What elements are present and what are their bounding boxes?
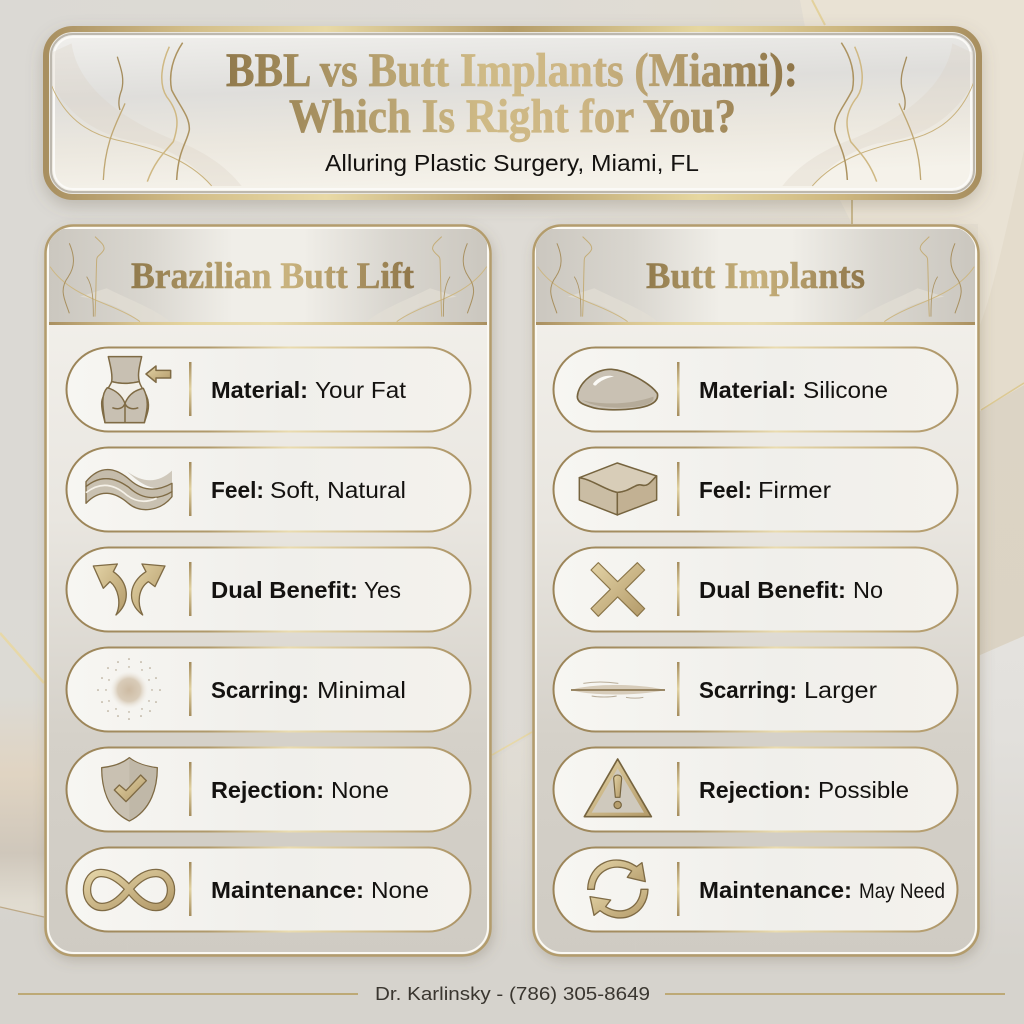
row: Maintenance [66, 848, 470, 932]
text: Scarring [211, 677, 406, 703]
text: Feel: Feel: [699, 477, 752, 503]
panel: Butt Implants [534, 226, 978, 956]
row: Material [66, 348, 470, 432]
text: Maintenance: None [371, 877, 429, 903]
text: Rejection [211, 777, 389, 803]
text: Material: Material: [211, 377, 308, 403]
text: Feel [699, 477, 831, 503]
text: Rejection: Possible [818, 777, 909, 803]
icon: two diverging arrows [93, 564, 165, 615]
icon: warning triangle [584, 759, 651, 817]
icon: soft waves [86, 470, 172, 510]
row: Scarring [554, 648, 958, 732]
text: Dual Benefit: Yes [364, 577, 401, 603]
panel: Brazilian Butt Lift [46, 226, 490, 956]
row: Dual Benefit [554, 548, 958, 632]
text: Scarring: Larger [804, 677, 877, 703]
footer: Dr. Karlinsky - (786) 305-8649 [375, 984, 650, 1004]
icon: waist and hips with arrow [102, 357, 171, 423]
text: Dual Benefit: No [853, 577, 883, 603]
text: Maintenance: May Need [859, 880, 945, 903]
text: Feel: Soft, Natural [270, 477, 406, 503]
text: Material: Your Fat [315, 377, 407, 403]
text: Rejection: None [331, 777, 389, 803]
text: Rejection: Rejection: [211, 777, 324, 803]
icon: firm block [579, 463, 657, 515]
text: Maintenance: Maintenance: [699, 877, 852, 903]
panel header: Butt Implants: Butt Implants [646, 256, 865, 297]
icon: refresh arrows [588, 860, 648, 918]
text: Scarring: Minimal [317, 677, 406, 703]
panel header: Brazilian Butt Lift: Brazilian Butt Lift [131, 256, 415, 297]
icon: shield with check [102, 758, 157, 821]
title text: Which Is Right for You? [289, 90, 736, 143]
row: Material [554, 348, 958, 432]
text: Maintenance [211, 877, 429, 903]
text: Maintenance: Maintenance: [211, 877, 364, 903]
text: Maintenance [699, 877, 945, 903]
text: Scarring: Scarring: [699, 677, 797, 703]
icon: X mark [591, 563, 645, 616]
text: Dual Benefit: Dual Benefit: [211, 577, 358, 603]
text: Material: Material: [699, 377, 796, 403]
subtitle: Alluring Plastic Surgery, Miami, FL [325, 150, 699, 176]
row: Maintenance [554, 848, 958, 932]
icon: minimal scar dots [97, 658, 161, 720]
text: Material [211, 377, 407, 403]
text: Rejection: Rejection: [699, 777, 811, 803]
text: Feel: Feel: [211, 477, 264, 503]
title banner [46, 29, 979, 197]
text: Material [699, 377, 888, 403]
text: Material: Silicone [803, 377, 888, 403]
icon: infinity [87, 873, 171, 907]
text: Dual Benefit: Dual Benefit: [699, 577, 846, 603]
text: Scarring: Scarring: [211, 677, 309, 703]
text: Rejection [699, 777, 909, 803]
row: Rejection [554, 748, 958, 832]
panel header: Brazilian Butt Lift [49, 229, 487, 325]
text: Feel: Firmer [758, 477, 831, 503]
icon: silicone implant [577, 369, 658, 410]
row: Feel [554, 448, 958, 532]
text: Scarring [699, 677, 877, 703]
text: Feel [211, 477, 406, 503]
row: Rejection [66, 748, 470, 832]
row: Dual Benefit [66, 548, 470, 632]
panel header: Butt Implants [536, 229, 975, 325]
row: Scarring [66, 648, 470, 732]
row: Feel [66, 448, 470, 532]
icon: linear scar [571, 682, 665, 698]
title text: BBL vs Butt Implants (Miami): [226, 44, 798, 97]
